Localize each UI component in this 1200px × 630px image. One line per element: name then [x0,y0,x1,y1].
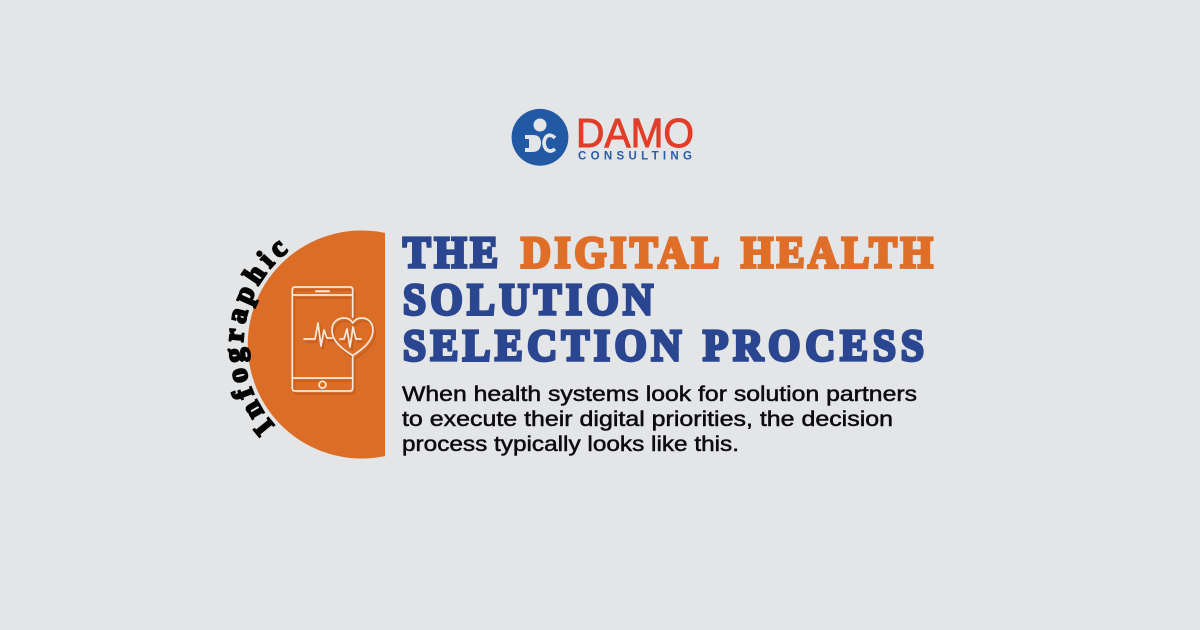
title line 3: SELECTION [403,322,681,370]
title line 3: PROCESS [703,322,924,370]
logo: Damo Consulting [512,109,694,166]
title line 2: SOLUTION [403,276,653,324]
description: process typically looks like this. [402,433,739,456]
title [403,229,933,370]
logo tagline: CONSULTING [578,150,692,162]
orange half circle [248,231,385,458]
title line 3 [403,322,924,370]
logo badge [512,109,568,166]
title line 1: THE [403,229,498,277]
logo wordmark: DAMO [576,110,694,156]
title line 1: HEALTH [741,229,933,277]
icon: phone with heart and pulse [292,287,375,394]
icon shadow [294,290,375,394]
description [402,383,917,456]
description: to execute their digital priorities, the decision [402,408,893,431]
title line 1: DIGITAL [521,229,719,277]
description: When health systems look for solution partners [402,383,917,406]
curved label: Infographic: Infographic [227,240,288,438]
title line 1 [403,229,933,277]
